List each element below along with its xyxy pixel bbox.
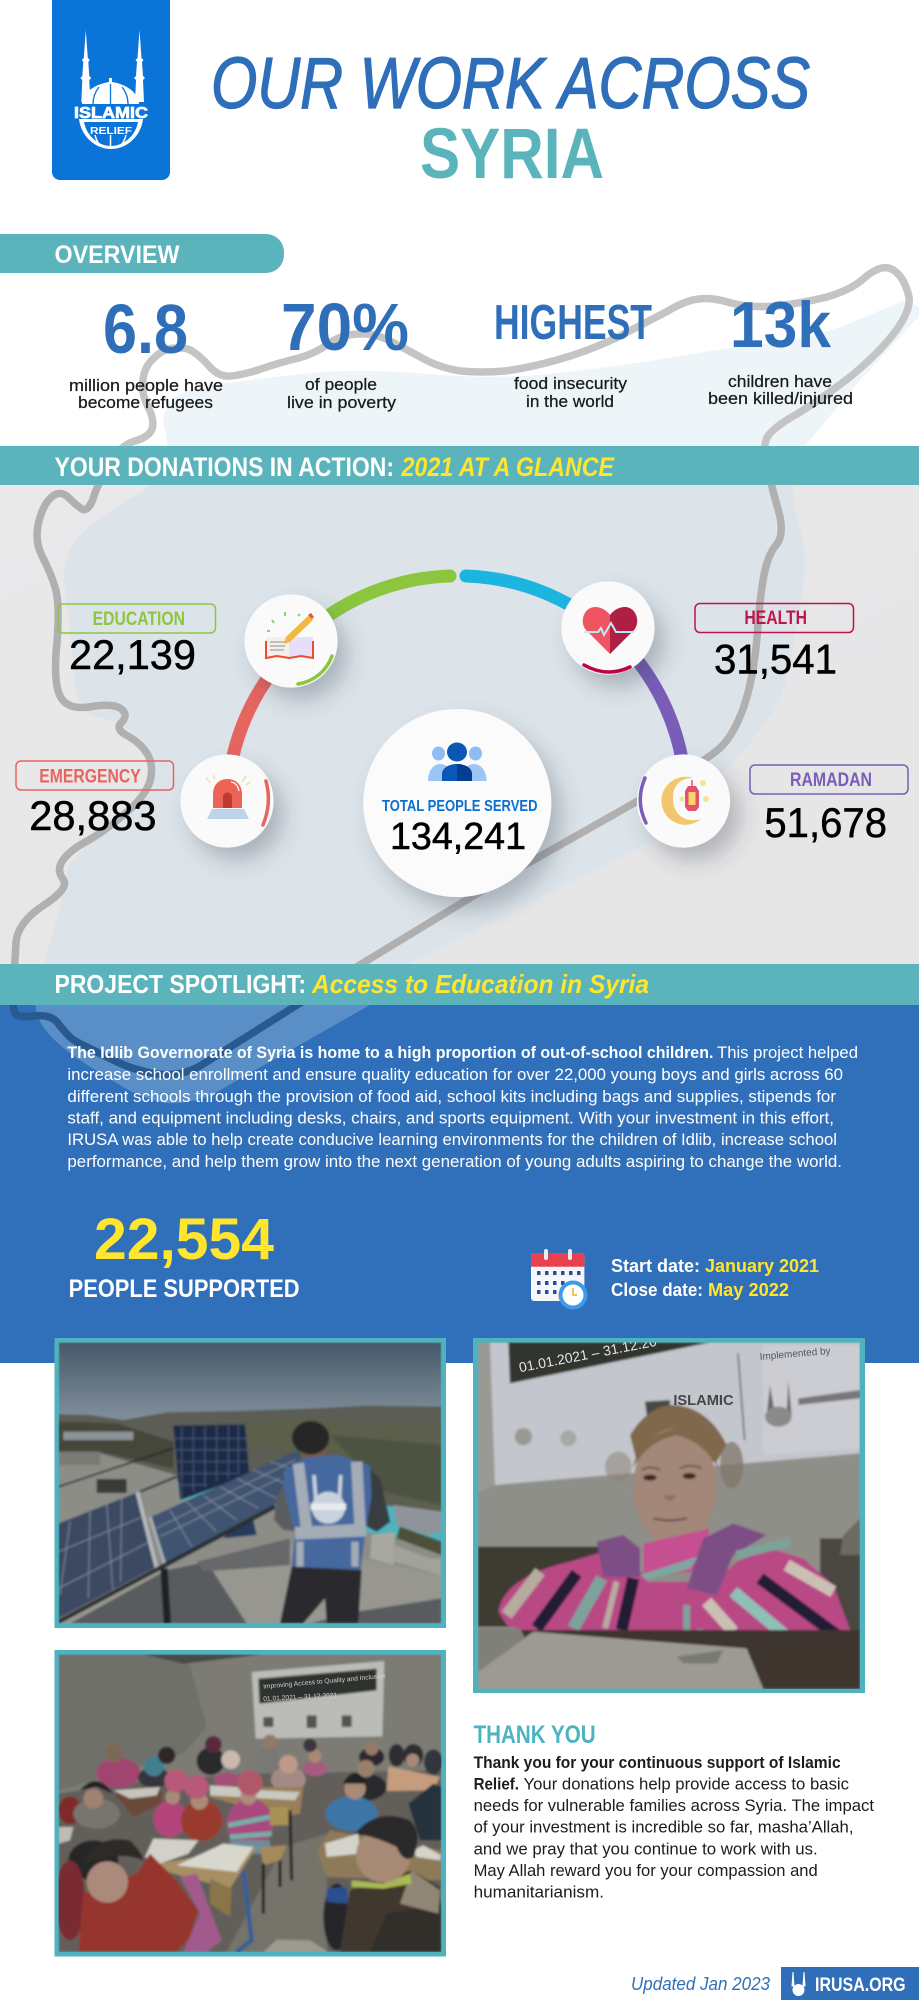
text block: thank you: and we pray that you continue to work with us. [474, 1839, 818, 1858]
panel: total people served [363, 709, 551, 897]
stat: 70% in poverty [281, 290, 409, 412]
text block: thank you: Thank you for your continuous support of Islamic [474, 1753, 841, 1772]
callout: education [58, 604, 216, 678]
text block: dates [611, 1256, 819, 1300]
text block: dates: May 2022 [708, 1280, 789, 1300]
stat: highest food insecurity: HIGHEST [494, 296, 652, 350]
stat: 6.8 million refugees: million people have [69, 376, 223, 395]
chart: arc ring [231, 576, 683, 765]
icon: calendar [531, 1249, 588, 1310]
footer: website badge [781, 1967, 919, 2000]
callout: emergency [16, 761, 174, 839]
text block: dates: Start date: [611, 1256, 700, 1276]
stat: 13k children: been killed/injured [708, 389, 853, 408]
stat: highest food insecurity: in the world [526, 392, 614, 411]
photo: classroom with children: 01.01.2021 – 31.12.2021 [263, 1692, 338, 1703]
icon: people [428, 742, 486, 781]
text block: project description: different schools through the provision of food aid, school kits including bags and supplies, stipends for [67, 1087, 836, 1106]
icon: health heart [561, 581, 655, 675]
photo: girl at school desk: ISLAMIC [673, 1393, 734, 1409]
panel: total people served: TOTAL PEOPLE SERVED [382, 798, 538, 815]
text block: project description: IRUSA was able to help create conducive learning environments for the children of Idlib, increase school [67, 1130, 837, 1149]
stat: 6.8 million refugees [69, 290, 223, 412]
photo: classroom with children [54, 1650, 446, 1956]
title: SYRIA [420, 115, 604, 194]
text block: thank you: needs for vulnerable families across Syria. The impact [474, 1796, 874, 1815]
callout: education: EDUCATION [93, 609, 185, 630]
logo: Islamic Relief [52, 0, 170, 180]
heading bar: donations in action [0, 446, 919, 485]
text block: thank you: Your donations help provide access to basic [524, 1774, 849, 1793]
stat: highest food insecurity [494, 296, 652, 411]
text block: project description: staff, and equipment including desks, chairs, and sports equipment. With your investment in this effort, [67, 1108, 834, 1128]
stat: 70% in poverty: live in poverty [287, 393, 397, 412]
photo: girl at school desk: Implemented by [759, 1346, 831, 1363]
text block: project description: increase school enrollment and ensure quality education for over 22,000 young boys and girls across 60 [67, 1065, 843, 1084]
stat: 13k children: children have [728, 372, 832, 391]
text block: thank you [474, 1721, 874, 1902]
overview heading bar: OVERVIEW [54, 241, 180, 269]
text block: thank you: humanitarianism. [474, 1882, 604, 1902]
heading bar: project spotlight: PROJECT SPOTLIGHT: [54, 969, 306, 999]
callout: emergency: EMERGENCY [39, 766, 141, 788]
footer: update date: Updated Jan 2023 [631, 1974, 770, 1994]
stat: people supported: PEOPLE SUPPORTED [69, 1275, 300, 1303]
heading bar: donations in action: YOUR DONATIONS IN ACTION: [54, 452, 394, 482]
heading bar: project spotlight: Access to Education in Syria [311, 969, 649, 999]
text block: thank you: May Allah reward you for your compassion and [474, 1861, 818, 1880]
stat: 70% in poverty: of people [305, 375, 377, 394]
icon: education book [244, 594, 338, 688]
logo: Islamic Relief: ISLAMIC [74, 105, 148, 122]
stat: 6.8 million refugees: 6.8 [103, 290, 188, 368]
stat: highest food insecurity: food insecurity [514, 374, 628, 393]
text block: dates: January 2021 [705, 1256, 819, 1276]
text block: dates: Close date: [611, 1280, 703, 1300]
logo: Islamic Relief: RELIEF [90, 125, 133, 137]
icon: emergency siren [180, 754, 274, 848]
callout: health: HEALTH [744, 608, 807, 629]
callout: health [695, 604, 854, 682]
stat: people supported [69, 1207, 300, 1303]
title: OUR WORK ACROSS [211, 44, 810, 124]
photo: girl at school desk [473, 1333, 865, 1693]
callout: ramadan: RAMADAN [790, 770, 872, 791]
photo: classroom with children: Improving Access to Quality and Inclusive [263, 1673, 386, 1691]
panel: overview [0, 234, 853, 412]
title [211, 44, 810, 194]
callout: ramadan [750, 765, 908, 846]
text block: project description: performance, and help them grow into the next generation of young adults aspiring to change the world. [67, 1152, 842, 1171]
text block: project description: This project helped [717, 1043, 858, 1062]
callout: health: 31,541 [714, 636, 837, 682]
stat: 70% in poverty: 70% [281, 290, 409, 365]
photo: girl at school desk: 01.01.2021 – 31.12.20 [518, 1333, 658, 1375]
icon: ramadan crescent [637, 754, 730, 848]
heading bar: donations in action: 2021 AT A GLANCE [401, 452, 615, 482]
callout: emergency: 28,883 [29, 792, 156, 839]
heading: thank you: THANK YOU [474, 1721, 596, 1749]
stat: people supported: 22,554 [94, 1207, 274, 1272]
text block: thank you: Relief. [474, 1774, 519, 1793]
panel: total people served: 134,241 [390, 816, 526, 858]
stat: 6.8 million refugees: become refugees [78, 393, 213, 412]
text block: thank you: of your investment is incredible so far, masha’Allah, [474, 1818, 854, 1837]
photo: solar panels and aid worker [54, 1338, 446, 1628]
stat: 13k children: 13k [730, 288, 832, 361]
overview heading bar [0, 234, 284, 273]
text block: project description [67, 1043, 858, 1171]
stat: 13k children [708, 288, 853, 408]
callout: education: 22,139 [69, 631, 196, 678]
text block: project description: The Idlib Governorate of Syria is home to a high proportion of out-of-school children. [67, 1043, 713, 1062]
heading bar: project spotlight [0, 964, 919, 1005]
callout: ramadan: 51,678 [764, 799, 887, 846]
Syria map background [13, 268, 919, 1103]
